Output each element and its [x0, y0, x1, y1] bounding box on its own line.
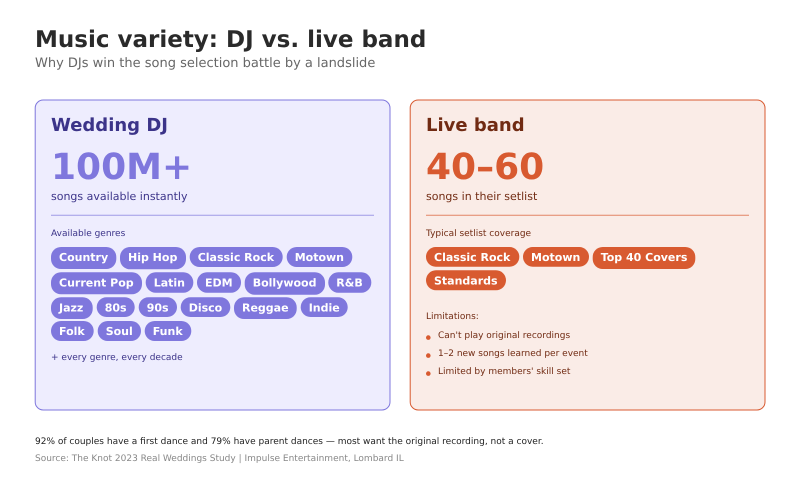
panel background: [410, 100, 765, 410]
pill: Disco: [181, 297, 230, 317]
pill: Bollywood: Bollywood: [253, 276, 317, 289]
pill: Reggae: [234, 297, 297, 319]
pill: 80s: 80s: [105, 301, 127, 314]
pill: 80s: [97, 297, 135, 317]
subtitle: Why DJs win the song selection battle by a landslide: [35, 56, 375, 71]
pill: 90s: [139, 297, 177, 317]
pill: Current Pop: Current Pop: [59, 276, 134, 289]
pill: Motown: [287, 247, 352, 267]
source: Source: The Knot 2023 Real Weddings Study | Impulse Entertainment, Lombard IL: [35, 454, 404, 464]
pill: Jazz: Jazz: [58, 301, 83, 314]
pill: Latin: [146, 272, 193, 293]
big number: 100M+: [51, 147, 192, 188]
pill: Motown: Motown: [295, 251, 344, 264]
pill: Country: [51, 247, 116, 269]
pill: Indie: Indie: [309, 301, 340, 314]
setlist pills: [426, 247, 695, 290]
pill: Funk: Funk: [153, 325, 183, 338]
pill: Classic Rock: [190, 247, 283, 267]
pill: R&B: [328, 272, 371, 293]
pill: 90s: 90s: [147, 301, 169, 314]
limitations label: Limitations:: [426, 312, 479, 322]
pill: Jazz: [51, 297, 93, 319]
pill: Classic Rock: Classic Rock: [198, 251, 275, 264]
title: Music variety: DJ vs. live band: [35, 27, 426, 53]
footnote: 92% of couples have a first dance and 79% have parent dances — most want the original recording, not a cover.: [35, 437, 544, 447]
genre pills: [51, 247, 371, 341]
pill: Indie: [301, 297, 348, 317]
pill: Disco: Disco: [189, 301, 223, 314]
pill: Current Pop: [51, 272, 142, 294]
pill: Country: Country: [59, 251, 108, 264]
pill: Folk: [51, 321, 94, 341]
pill: Latin: Latin: [154, 276, 185, 289]
limitations list: [426, 331, 588, 377]
pill: Top 40 Covers: Top 40 Covers: [601, 251, 688, 264]
panel heading: Live band: [426, 115, 525, 136]
pill: Standards: [426, 270, 506, 290]
pill: Folk: Folk: [59, 325, 85, 338]
panel: live band: [410, 100, 765, 410]
pill: Funk: [145, 321, 191, 341]
pill: Reggae: Reggae: [242, 301, 289, 314]
pill: Classic Rock: [426, 247, 519, 267]
limitation 3: Limited by members' skill set: [438, 367, 571, 377]
panel heading: Wedding DJ: [51, 115, 168, 136]
genres note: + every genre, every decade: [51, 353, 183, 363]
pill: R&B: R&B: [336, 276, 363, 289]
pill: Classic Rock: Classic Rock: [434, 251, 511, 264]
pill: Soul: Soul: [106, 325, 133, 338]
pill: EDM: [197, 272, 241, 293]
pill: EDM: EDM: [205, 276, 233, 289]
pill: Hip Hop: Hip Hop: [128, 251, 177, 264]
pill: Top 40 Covers: [593, 247, 695, 269]
big number: 40–60: [426, 147, 544, 188]
pill: Soul: [98, 321, 141, 341]
pill: Hip Hop: [120, 247, 186, 269]
limitation 2: 1–2 new songs learned per event: [438, 349, 588, 359]
pill: Bollywood: [245, 272, 325, 295]
big number caption: songs in their setlist: [426, 190, 538, 203]
panel background: [35, 100, 390, 410]
pill: Motown: Motown: [531, 251, 580, 264]
limitation 1: Can't play original recordings: [438, 331, 570, 341]
setlist label: Typical setlist coverage: [425, 229, 532, 239]
pill: Motown: [523, 247, 589, 267]
panel: wedding DJ: [35, 100, 390, 410]
genres label: Available genres: [51, 229, 126, 239]
big number caption: songs available instantly: [51, 190, 188, 203]
pill: Standards: Standards: [434, 274, 498, 287]
